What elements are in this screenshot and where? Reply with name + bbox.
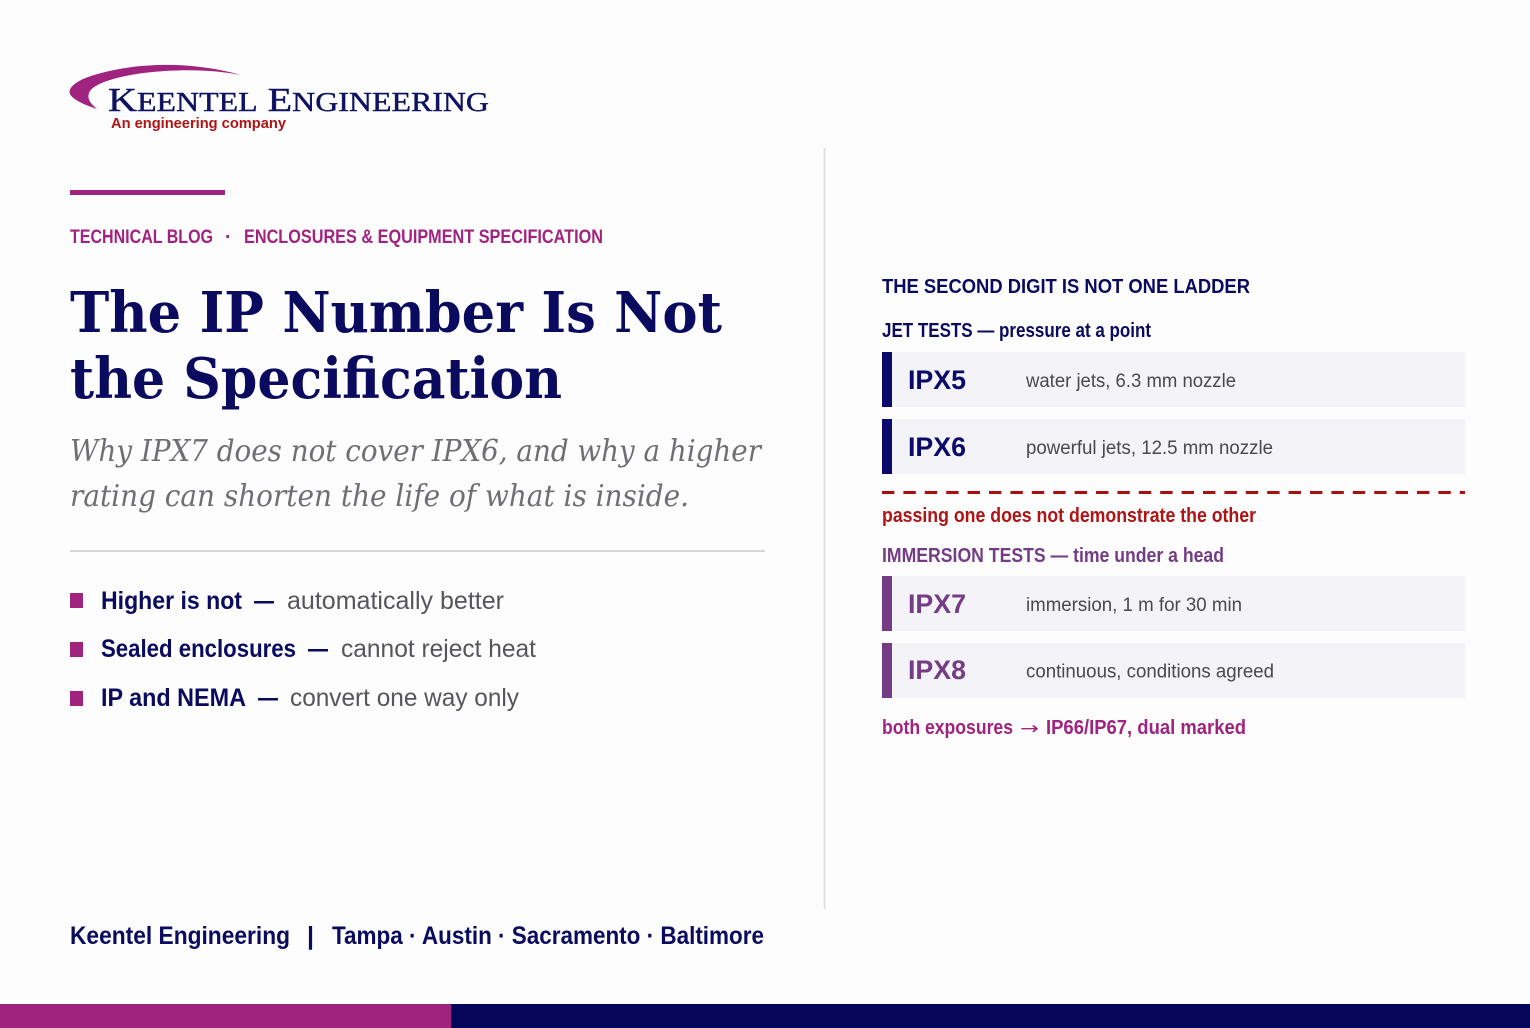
row: IPX7 <box>882 576 1465 631</box>
dual marking note <box>882 717 1246 739</box>
key point: sealed enclosures: Sealed enclosures <box>101 635 296 663</box>
key point: IP and NEMA: convert one way only <box>290 684 519 712</box>
dual marking note: both exposures <box>882 717 1013 739</box>
dual marking note: → <box>1020 719 1039 739</box>
footer locations: | <box>307 922 314 950</box>
vertical divider <box>824 148 825 909</box>
row: IPX8 <box>882 643 1465 698</box>
bottom colour bar <box>0 1004 1530 1028</box>
divider <box>70 550 765 552</box>
logo tagline: An engineering company <box>111 116 286 132</box>
eyebrow: TECHNICAL BLOG <box>70 227 213 248</box>
icon: logo swoosh <box>70 65 241 109</box>
eyebrow: ENCLOSURES & EQUIPMENT SPECIFICATION <box>244 227 603 248</box>
subtitle: Why IPX7 does not cover IPX6, and why a higher <box>70 434 763 469</box>
key point: sealed enclosures: — <box>308 635 328 663</box>
key point: higher is not <box>70 587 504 615</box>
row: IPX6 <box>882 419 1465 474</box>
key point: higher is not: — <box>254 587 274 615</box>
footer locations: Tampa · Austin · Sacramento · Baltimore <box>332 922 764 950</box>
key point: sealed enclosures <box>70 635 536 663</box>
subtitle: rating can shorten the life of what is inside. <box>70 479 689 514</box>
title <box>70 280 722 412</box>
key point: IP and NEMA <box>70 684 519 712</box>
logo wordmark: KEENTEL ENGINEERING <box>108 82 489 119</box>
logo: Keentel Engineering <box>70 65 489 132</box>
row: IPX5: water jets, 6.3 mm nozzle <box>1025 371 1236 392</box>
key point: sealed enclosures: cannot reject heat <box>341 635 536 663</box>
row: IPX8: IPX8 <box>908 655 966 685</box>
row: IPX5 <box>882 352 1465 407</box>
row: IPX8: continuous, conditions agreed <box>1026 662 1274 682</box>
warning note: passing one does not demonstrate the other <box>882 505 1256 527</box>
row: IPX7: immersion, 1 m for 30 min <box>1026 595 1242 616</box>
jet tests label: JET TESTS — pressure at a point <box>882 320 1151 342</box>
row: IPX7: IPX7 <box>908 589 966 619</box>
key point: higher is not: automatically better <box>287 587 504 615</box>
panel: second digit comparison <box>882 275 1465 739</box>
title: The IP Number Is Not <box>70 280 722 346</box>
row: IPX5: IPX5 <box>908 365 966 395</box>
panel heading: THE SECOND DIGIT IS NOT ONE LADDER <box>882 275 1250 298</box>
title: the Specification <box>70 346 562 412</box>
accent rule <box>70 190 225 195</box>
footer locations <box>70 922 764 950</box>
key point: higher is not: Higher is not <box>101 587 243 615</box>
eyebrow <box>70 227 603 248</box>
eyebrow: · <box>225 227 231 248</box>
footer locations: Keentel Engineering <box>70 922 290 950</box>
dashed separator <box>882 491 1465 494</box>
dual marking note: IP66/IP67, dual marked <box>1046 717 1246 739</box>
key point: IP and NEMA: IP and NEMA <box>101 684 246 712</box>
row: IPX6: IPX6 <box>908 432 966 462</box>
key points list <box>70 587 536 712</box>
row: IPX6: powerful jets, 12.5 mm nozzle <box>1026 438 1273 459</box>
key point: IP and NEMA: — <box>258 684 278 712</box>
subtitle <box>70 434 763 514</box>
immersion tests label: IMMERSION TESTS — time under a head <box>882 545 1224 567</box>
